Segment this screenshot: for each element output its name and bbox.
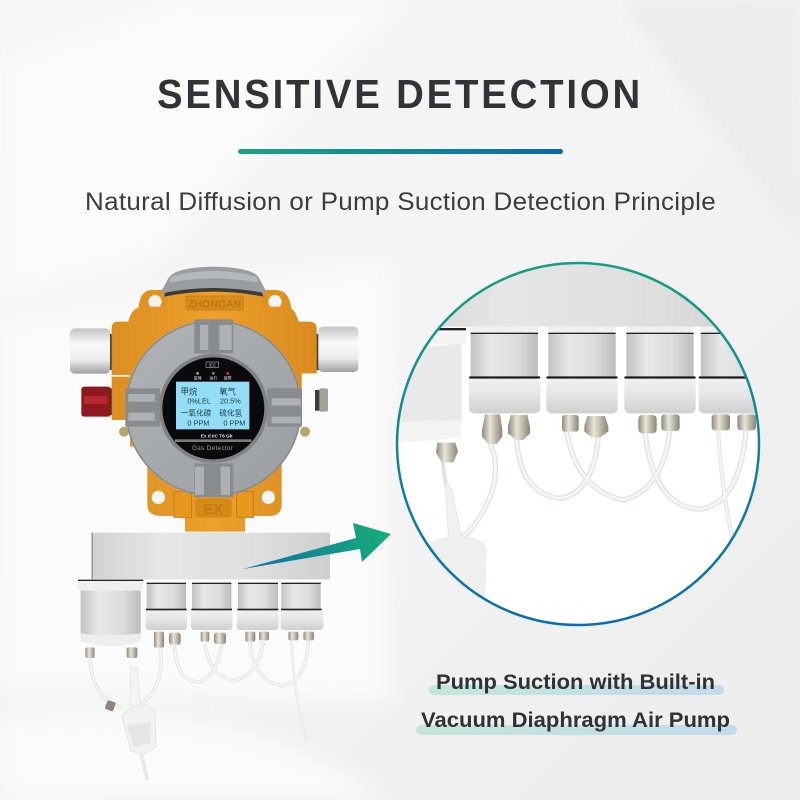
circle outline	[397, 263, 759, 625]
indicator lights	[194, 362, 232, 381]
enlarged filter bottle	[427, 480, 487, 603]
LCD screen: 0%LEL	[187, 396, 211, 405]
enlarged box	[442, 264, 714, 327]
LCD screen: 硫化氢	[219, 408, 243, 418]
LCD screen	[176, 382, 249, 429]
top cap	[162, 267, 266, 297]
LCD screen: 0 PPM	[187, 418, 209, 427]
gas detector label	[175, 439, 252, 452]
right silver gland	[312, 327, 358, 372]
LCD screen: 氧气	[219, 386, 237, 396]
enlarged sensors	[469, 327, 770, 413]
brass fittings	[85, 632, 314, 712]
enlarged pump	[398, 328, 466, 442]
arrow	[243, 523, 391, 569]
front ring	[125, 319, 302, 497]
indicator lights: IEC	[209, 362, 216, 367]
LCD screen: 甲烷	[181, 386, 198, 396]
label line 1: Pump Suction with Built-in	[436, 670, 715, 694]
enlarged tubes	[443, 430, 746, 543]
circle background	[398, 264, 758, 624]
brand emboss: ZHONGAN	[188, 298, 241, 310]
right port	[315, 388, 328, 412]
sensor modules	[146, 583, 323, 630]
housing	[112, 290, 317, 532]
gas detector	[70, 267, 358, 532]
indicator lights: 故障	[194, 375, 202, 381]
subtitle: Natural Diffusion or Pump Suction Detection Principle	[85, 188, 716, 216]
mounting screws	[119, 427, 310, 437]
title: SENSITIVE DETECTION	[157, 71, 643, 117]
zoom circle	[390, 260, 770, 625]
gas detector label: Gas Detector	[192, 445, 233, 452]
filter bottle	[122, 667, 156, 780]
EX mark: EX	[204, 502, 223, 518]
grey box	[92, 533, 330, 579]
indicator lights: 运行	[209, 375, 217, 381]
enlarged fittings	[436, 414, 756, 462]
LCD screen: 20.5%	[220, 396, 241, 405]
air tubes	[90, 642, 308, 741]
vacuum pump	[78, 580, 143, 646]
left silver gland	[70, 328, 117, 374]
rating label: Ex d IIC T6 Gb	[201, 433, 233, 438]
pump assembly	[78, 533, 330, 780]
indicator lights: 报警	[224, 375, 232, 381]
red alarm lamp	[81, 387, 116, 417]
LCD screen: 一氧化碳	[181, 408, 212, 418]
title underline	[238, 149, 563, 154]
label line 2: Vacuum Diaphragm Air Pump	[421, 708, 730, 732]
LCD screen: 0 PPM	[223, 418, 245, 427]
display window	[162, 357, 264, 459]
